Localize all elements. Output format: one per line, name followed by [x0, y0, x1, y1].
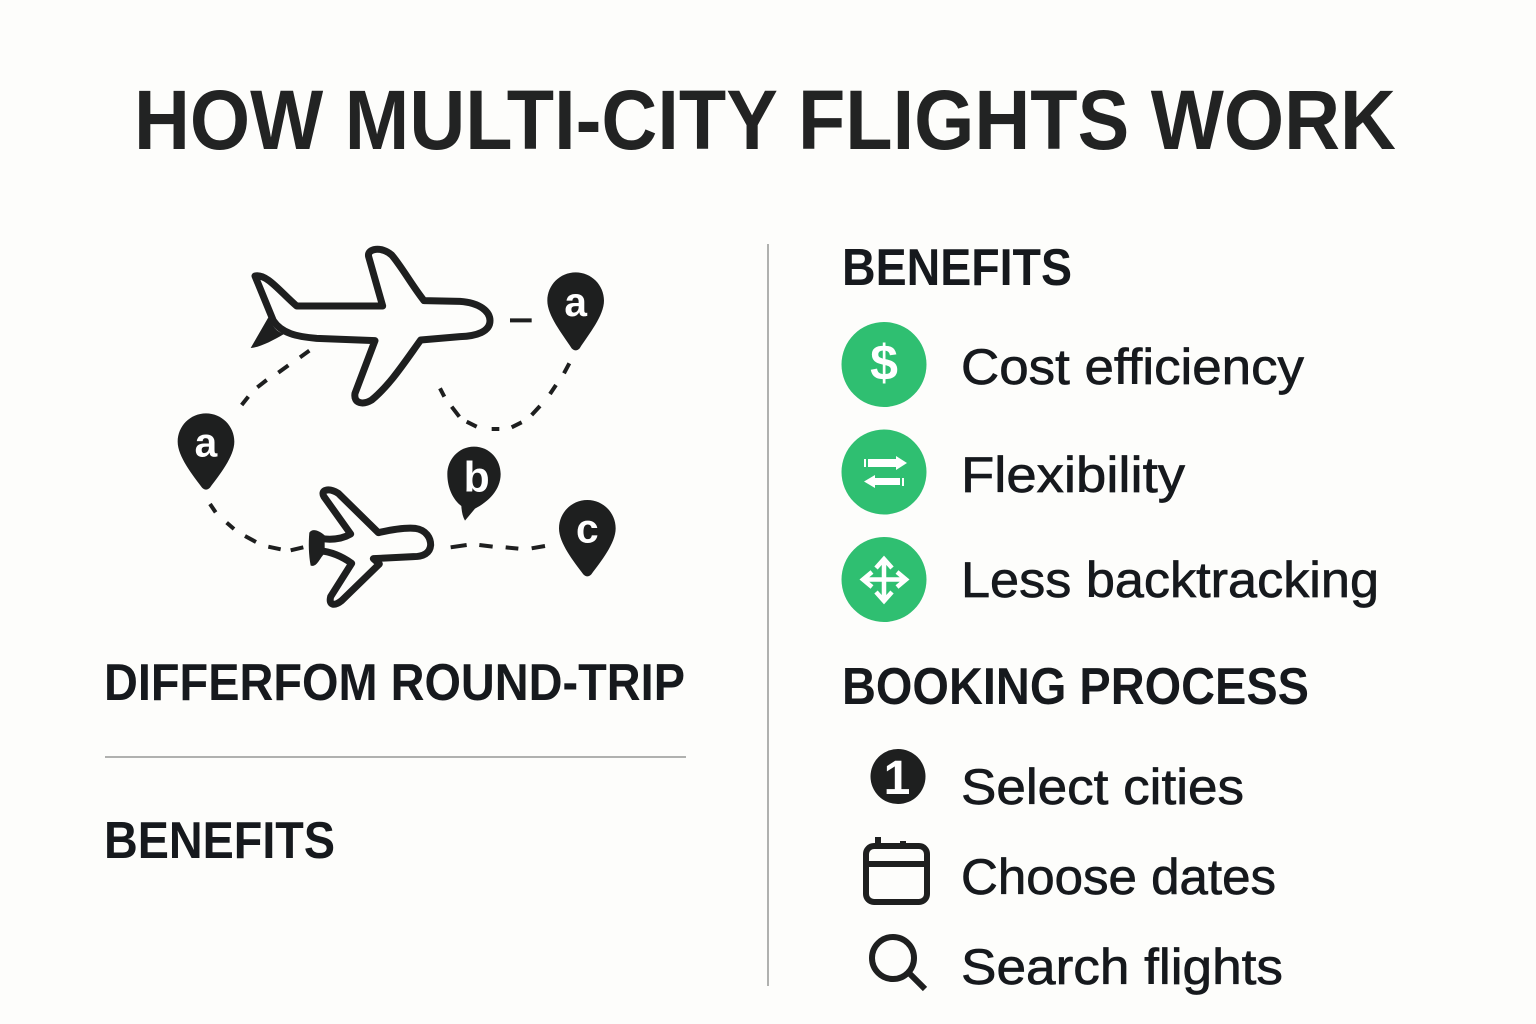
step: choose dates: Choose dates [961, 849, 1276, 905]
icon: magnifier [872, 937, 925, 989]
map pin: b speech bubble: b [464, 454, 490, 502]
title: HOW MULTI-CITY FLIGHTS WORK [134, 73, 1396, 167]
benefit: cost efficiency [842, 322, 1304, 407]
step: select cities [870, 749, 1244, 815]
route illustration [178, 249, 616, 604]
icon: number one: 1 [884, 752, 910, 805]
step: search flights: Search flights [961, 939, 1283, 995]
icon: four-way arrows [842, 537, 926, 622]
map pin: c [559, 500, 616, 576]
map pin: a left: a [195, 420, 218, 466]
benefit: less backtracking [842, 537, 1379, 622]
benefit: flexibility: Flexibility [961, 447, 1185, 503]
benefit: cost efficiency: Cost efficiency [961, 339, 1304, 395]
icon: large airplane [251, 249, 490, 403]
heading: booking process: BOOKING PROCESS [842, 658, 1309, 716]
icon: number one [870, 749, 926, 805]
map pin: a left [178, 413, 234, 490]
map pin: c: c [576, 506, 599, 552]
icon: opposing arrows [842, 430, 926, 514]
icon: dollar [842, 322, 926, 407]
heading: benefits left: BENEFITS [104, 812, 335, 870]
heading: differ from round-trip: DIFFERFOM ROUND-TRIP [104, 654, 685, 712]
step: select cities: Select cities [961, 759, 1244, 815]
icon: small airplane [309, 490, 431, 604]
map pin: b speech bubble [447, 447, 501, 521]
step: choose dates [866, 837, 1276, 905]
icon: calendar [866, 837, 927, 902]
benefit: flexibility [842, 430, 1185, 514]
heading: benefits right: BENEFITS [842, 239, 1072, 297]
dashed flight routes [210, 320, 569, 550]
map pin: a top right [547, 272, 604, 350]
icon: dollar: $ [870, 335, 898, 391]
benefit: less backtracking: Less backtracking [961, 552, 1379, 608]
map pin: a top right: a [564, 279, 587, 325]
